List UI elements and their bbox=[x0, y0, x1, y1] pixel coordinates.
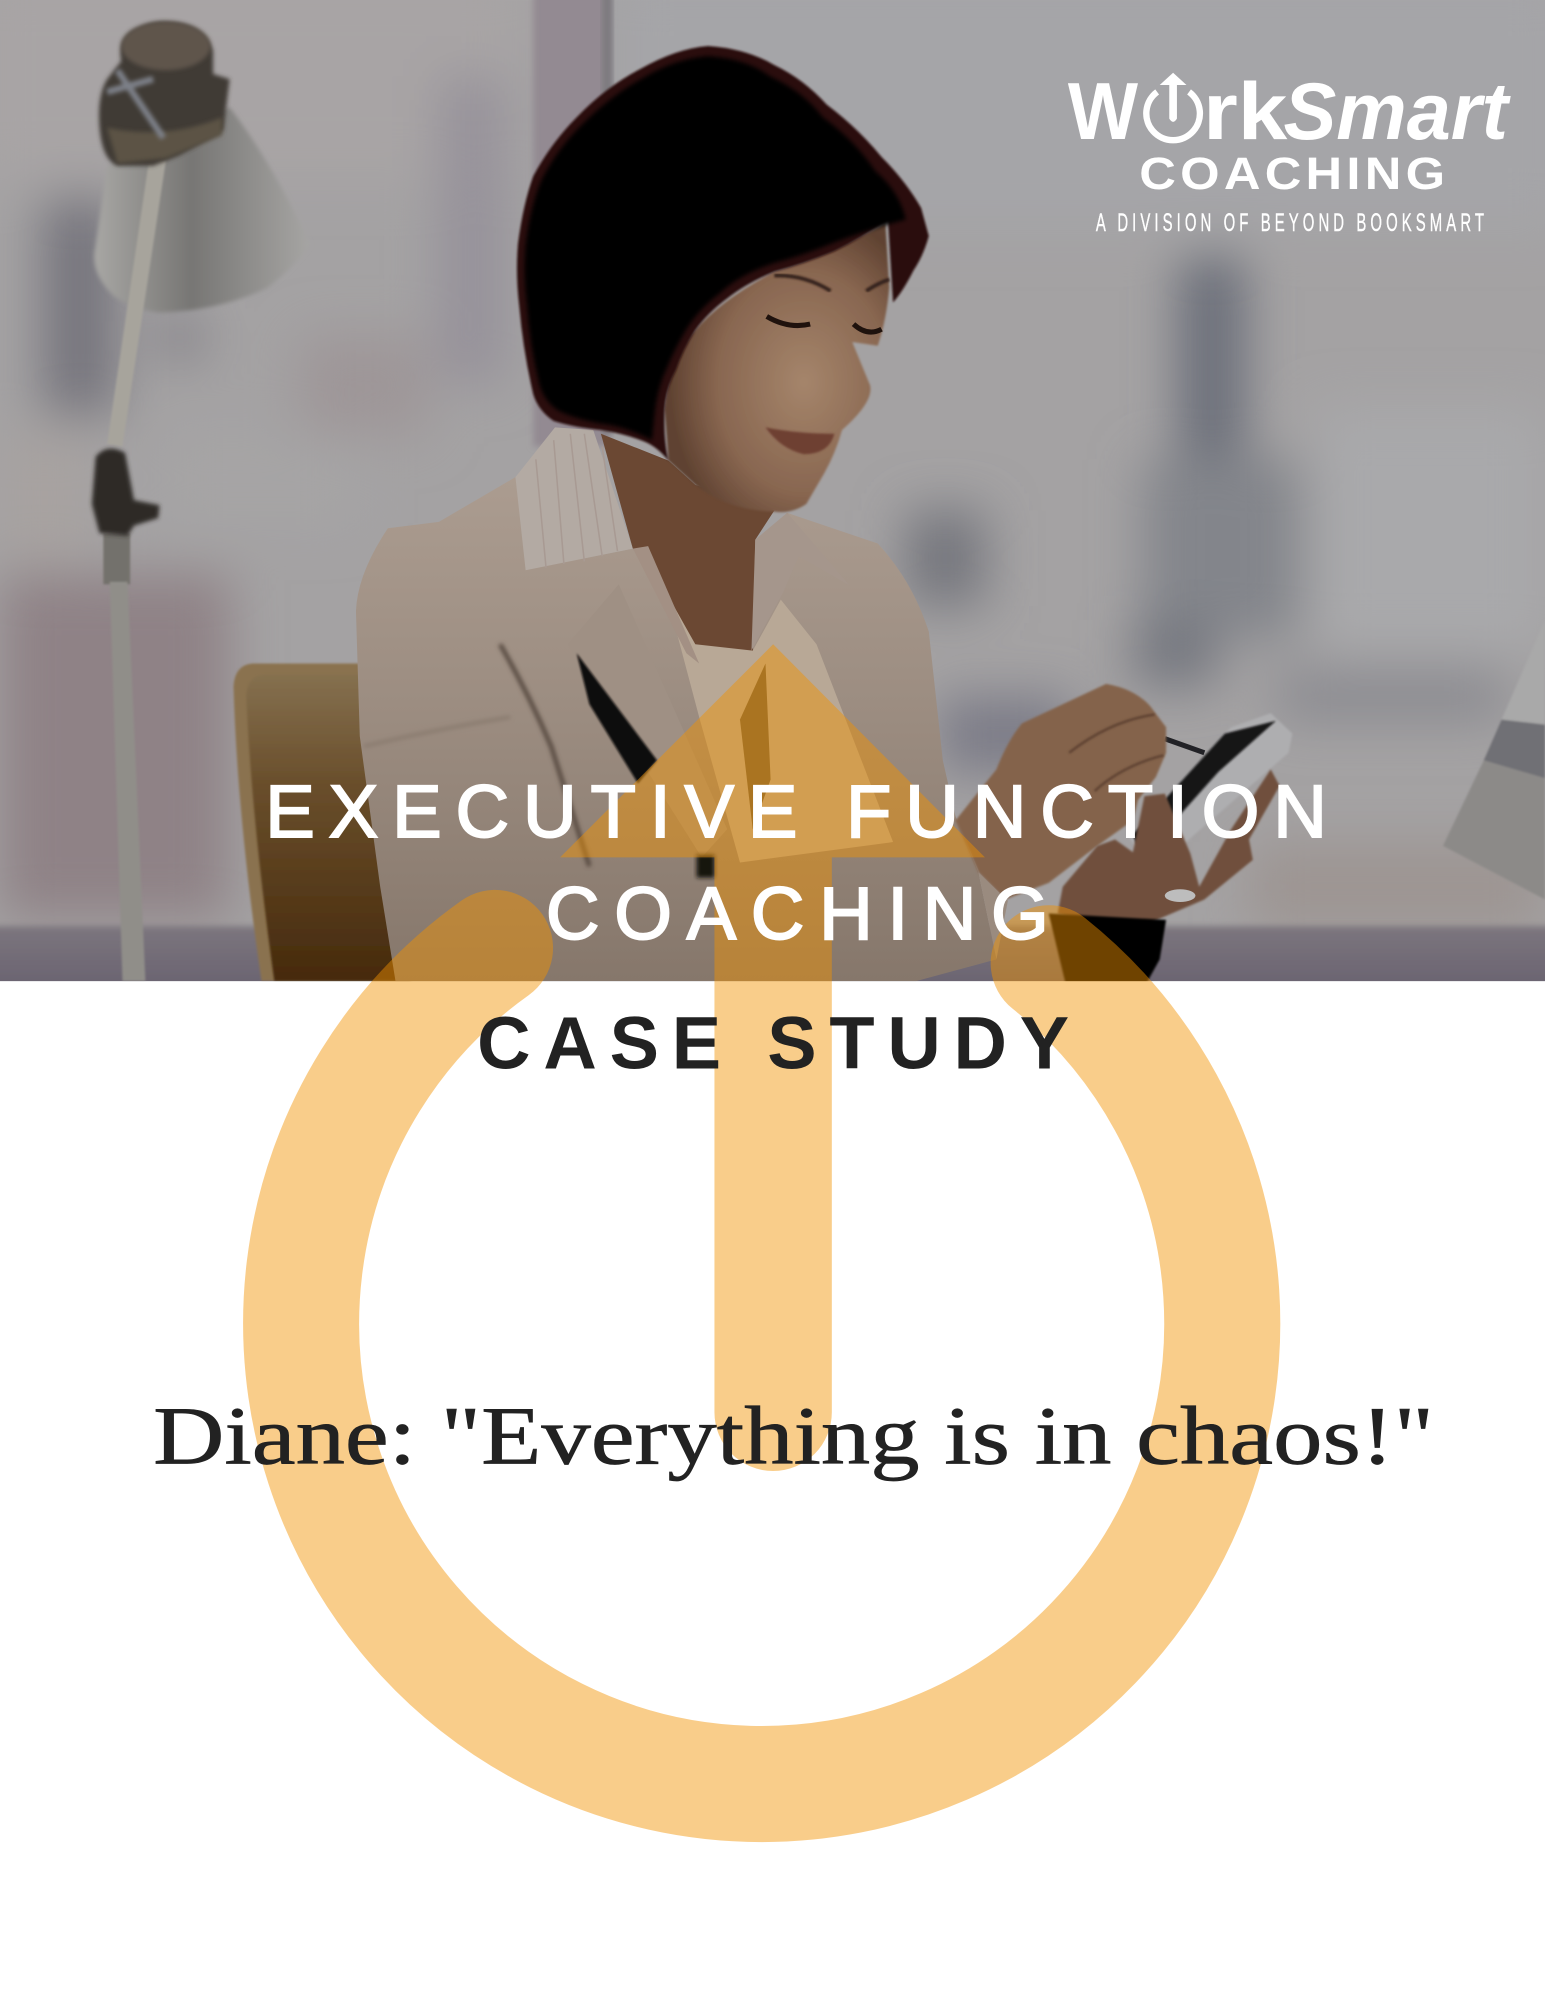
holding hand bbox=[1058, 769, 1280, 930]
quote: Diane: Diane: "Everything is in chaos!" bbox=[153, 1389, 1434, 1481]
coaching line: COACHING bbox=[1139, 148, 1445, 199]
phone bbox=[1130, 714, 1292, 843]
title: executive function coaching bbox=[265, 770, 1327, 955]
blurred city background bbox=[0, 90, 1542, 925]
office chair bbox=[232, 662, 372, 982]
wordmark bbox=[1068, 67, 1511, 157]
jacket sleeve creases bbox=[500, 644, 589, 866]
wordmark: Smart bbox=[1283, 67, 1511, 157]
lapel bbox=[698, 850, 708, 852]
jacket bbox=[356, 477, 996, 981]
hero photo: woman using a handheld device bbox=[0, 0, 1545, 990]
lamp clamp bbox=[92, 449, 159, 536]
window sill bbox=[0, 926, 1545, 990]
lamp head bbox=[99, 22, 230, 166]
writing hand bbox=[956, 684, 1166, 899]
wordmark: W bbox=[1068, 67, 1138, 157]
eyes bbox=[767, 316, 882, 332]
title: executive function coaching: EXECUTIVE FUNCTION bbox=[265, 770, 1327, 853]
ring bbox=[1165, 889, 1195, 902]
face bbox=[665, 223, 889, 512]
logo: WorkSmart Coaching bbox=[1068, 67, 1511, 237]
hair bbox=[517, 46, 929, 461]
striped collar bbox=[515, 427, 633, 570]
power ring bbox=[301, 948, 1222, 1784]
lamp shade bbox=[94, 107, 310, 313]
heading: case study: CASE STUDY bbox=[477, 1002, 1069, 1085]
power arrow bbox=[560, 644, 985, 1471]
orange power symbol watermark bbox=[301, 644, 1222, 1784]
window frame bbox=[533, 0, 610, 447]
blouse under arrow bbox=[666, 592, 893, 862]
lamp stem bbox=[107, 158, 166, 447]
neck bbox=[601, 434, 774, 651]
stylus bbox=[1165, 739, 1204, 753]
lips bbox=[765, 427, 834, 454]
logo power icon bbox=[1146, 73, 1200, 140]
wordmark: rk bbox=[1203, 67, 1288, 157]
desk lamp bbox=[92, 22, 310, 981]
title: executive function coaching: COACHING bbox=[546, 872, 1049, 955]
division tagline: A DIVISION OF BEYOND BOOKSMART bbox=[1096, 209, 1484, 237]
lapel shadow bbox=[577, 653, 657, 783]
cuff bbox=[1049, 914, 1166, 982]
hands and phone bbox=[956, 684, 1292, 982]
monitor bbox=[1444, 671, 1545, 899]
